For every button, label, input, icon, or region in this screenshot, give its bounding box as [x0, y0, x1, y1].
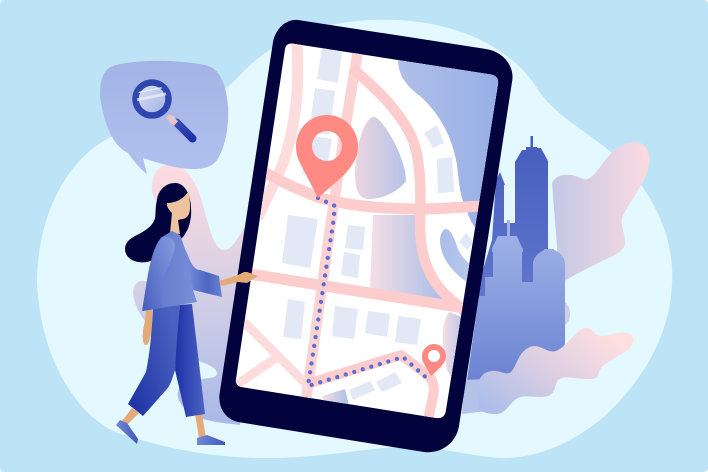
- map pin small: [422, 344, 446, 376]
- top body: [143, 231, 197, 311]
- left sleeve: [142, 237, 175, 311]
- bay: [440, 229, 470, 282]
- phone body: [219, 20, 513, 452]
- left arm: [143, 309, 154, 345]
- lower right park: [442, 312, 461, 377]
- shoes: [116, 420, 138, 444]
- phone screen map: [230, 40, 505, 425]
- front buildings: [467, 220, 565, 380]
- central park band: [370, 215, 445, 300]
- speech bubble: [100, 61, 228, 174]
- pink wave bottom right: [477, 328, 633, 414]
- buildings: [282, 48, 474, 400]
- park teardrop: [355, 117, 406, 199]
- legs: [122, 408, 139, 424]
- back towers: [475, 136, 548, 296]
- city skyline: [467, 136, 565, 380]
- map pin large: [296, 115, 358, 198]
- trousers right leg: [175, 304, 205, 417]
- hair: [125, 183, 191, 262]
- route dots: [308, 198, 430, 386]
- small blob beside city: [558, 300, 570, 328]
- roads: [232, 42, 482, 425]
- pale base under wave: [462, 379, 500, 414]
- icon: magnifying glass: [136, 82, 192, 138]
- water top right: [398, 60, 498, 228]
- pink cloud right: [552, 142, 649, 284]
- right sleeve: [186, 250, 222, 297]
- pink blob behind woman: [133, 165, 260, 425]
- woman's arm and hand over phone: [219, 272, 258, 286]
- trousers left leg: [128, 305, 180, 416]
- neck and face: [167, 192, 190, 234]
- woman: [116, 183, 225, 445]
